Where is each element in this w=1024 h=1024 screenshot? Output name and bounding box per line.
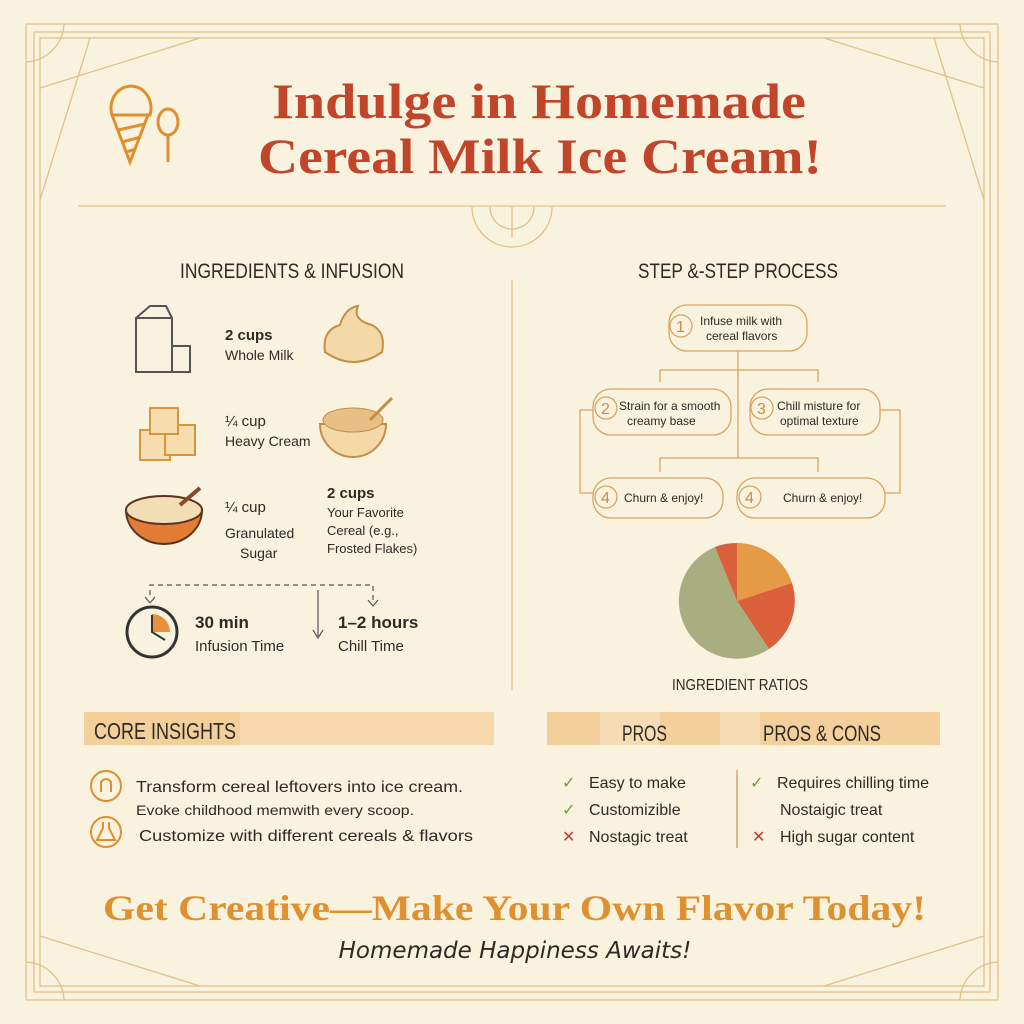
flowchart: 3 bbox=[757, 401, 766, 418]
icon: flask bbox=[91, 817, 121, 847]
ingredient: sugar bbox=[225, 499, 294, 561]
pie chart: ingredient ratios bbox=[672, 543, 808, 694]
cons list: Requires chilling time bbox=[777, 775, 929, 792]
pros list: Nostagic treat bbox=[589, 829, 688, 846]
flowchart: 4 bbox=[745, 490, 754, 507]
flowchart: creamy base bbox=[627, 414, 696, 428]
flowchart: Chill misture for bbox=[777, 399, 860, 413]
ingredient: milk bbox=[225, 327, 294, 363]
cons list: Nostaigic treat bbox=[780, 802, 883, 819]
pie chart: ingredient ratios: INGREDIENT RATIOS bbox=[672, 677, 808, 694]
ingredient: heavy cream bbox=[225, 413, 311, 449]
ingredient: cereal: Cereal (e.g., bbox=[327, 523, 399, 538]
tagline: Homemade Happiness Awaits! bbox=[339, 938, 691, 964]
infusion time: Infusion Time bbox=[195, 638, 284, 655]
heading band: pros & cons: PROS bbox=[622, 721, 667, 746]
icon: orange cereal bowl bbox=[126, 488, 202, 544]
chill time: Chill Time bbox=[338, 638, 404, 655]
flowchart: Churn & enjoy! bbox=[624, 491, 703, 505]
heading band: core insights: CORE INSIGHTS bbox=[94, 718, 236, 744]
insights text bbox=[136, 779, 473, 845]
chill time bbox=[338, 613, 418, 655]
icon: sugar cubes bbox=[140, 408, 195, 460]
flowchart: cereal flavors bbox=[706, 329, 777, 343]
title: Cereal Milk Ice Cream! bbox=[258, 128, 822, 184]
heading band: pros & cons: PROS & CONS bbox=[763, 721, 881, 746]
heading band: core insights bbox=[84, 712, 494, 745]
icon: light bulb bbox=[91, 771, 121, 801]
cons list bbox=[750, 775, 929, 846]
flowchart: 2 bbox=[601, 401, 610, 418]
call to action: Get Creative—Make Your Own Flavor Today! bbox=[103, 888, 926, 928]
icon: milk carton bbox=[136, 306, 190, 372]
ingredient: heavy cream: Heavy Cream bbox=[225, 433, 311, 449]
infusion time bbox=[195, 613, 284, 655]
ingredient: milk: 2 cups bbox=[225, 327, 273, 344]
ingredient: milk: Whole Milk bbox=[225, 347, 294, 363]
pros list bbox=[562, 775, 688, 846]
ingredient: cereal: 2 cups bbox=[327, 485, 375, 502]
insights text: Evoke childhood memwith every scoop. bbox=[136, 802, 414, 818]
flowchart: Strain for a smooth bbox=[619, 399, 720, 413]
insights text: Customize with different cereals & flavors bbox=[139, 828, 473, 845]
cons list: High sugar content bbox=[780, 829, 915, 846]
icon: cereal bowl bbox=[320, 398, 392, 457]
pros list: Easy to make bbox=[589, 775, 686, 792]
ingredient: cereal bbox=[327, 485, 417, 556]
ingredient: cereal: Your Favorite bbox=[327, 505, 404, 520]
flowchart bbox=[580, 305, 900, 518]
ingredient: sugar: ¼ cup bbox=[225, 499, 266, 516]
heading: ingredients: INGREDIENTS & INFUSION bbox=[180, 260, 404, 283]
pros list: ✓ bbox=[562, 775, 575, 792]
flowchart: 1 bbox=[676, 319, 685, 336]
icon: ice cream cone and spoon bbox=[111, 86, 178, 162]
title: Indulge in Homemade bbox=[272, 73, 806, 129]
flowchart: Churn & enjoy! bbox=[783, 491, 862, 505]
infusion time: 30 min bbox=[195, 613, 249, 632]
ingredient: sugar: Sugar bbox=[240, 545, 278, 561]
icon: clock bbox=[127, 607, 177, 657]
heading: steps: STEP &-STEP PROCESS bbox=[638, 260, 838, 283]
cons list: ✕ bbox=[752, 829, 765, 846]
pros list: ✕ bbox=[562, 829, 575, 846]
chill time: 1–2 hours bbox=[338, 613, 418, 632]
ingredient: cereal: Frosted Flakes) bbox=[327, 541, 417, 556]
cons list: ✓ bbox=[750, 775, 763, 792]
ingredient: sugar: Granulated bbox=[225, 525, 294, 541]
pros list: Customizible bbox=[589, 802, 681, 819]
insights text: Transform cereal leftovers into ice cream. bbox=[136, 779, 463, 796]
flowchart: optimal texture bbox=[780, 414, 859, 428]
pros list: ✓ bbox=[562, 802, 575, 819]
flowchart: Infuse milk with bbox=[700, 314, 782, 328]
flowchart: 4 bbox=[601, 490, 610, 507]
ingredient: heavy cream: ¼ cup bbox=[225, 413, 266, 430]
icon: whipped cream bbox=[325, 306, 383, 362]
heading band: pros & cons bbox=[547, 712, 940, 746]
title bbox=[258, 73, 822, 184]
